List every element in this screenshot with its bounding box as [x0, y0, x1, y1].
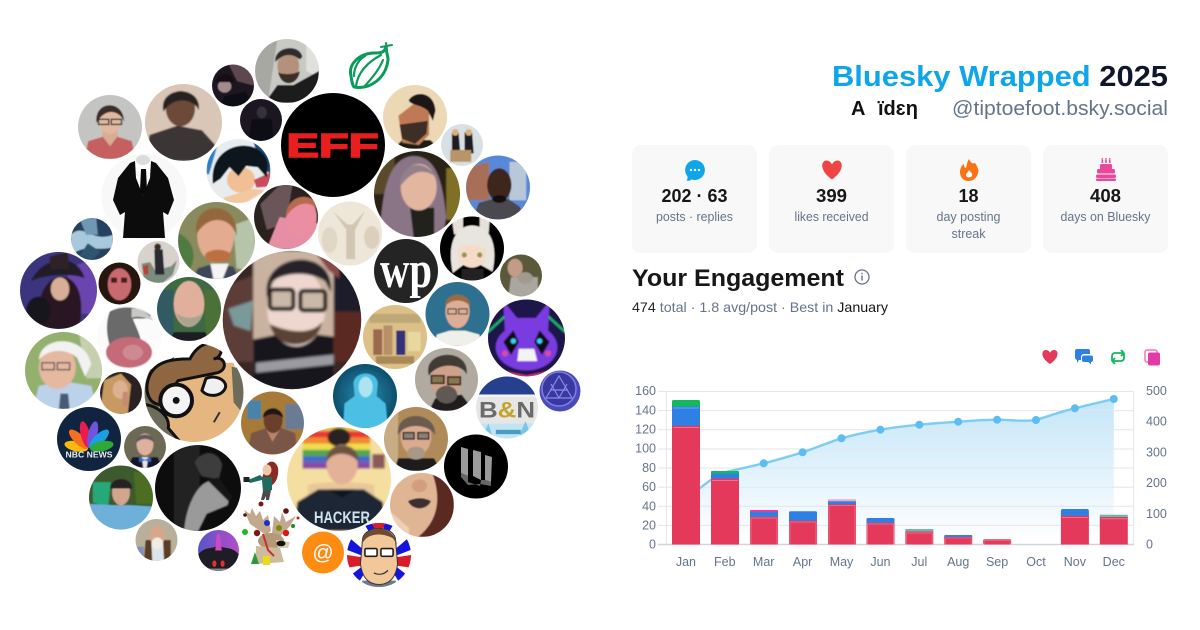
avatar: ginger man in suit: [178, 202, 255, 279]
icon: legend heart: [1042, 350, 1058, 364]
left axis labels: 120: [635, 422, 656, 436]
avatar: man profile on tan: [383, 85, 447, 149]
stat card: day posting streak: streak: [952, 227, 986, 241]
left axis labels: [635, 384, 656, 552]
stat card: day posting streak: day posting: [936, 210, 1001, 224]
avatar: man in bowtie: [124, 426, 166, 468]
left axis labels: 20: [642, 518, 656, 532]
avatar: bearded man on gray: [255, 39, 319, 103]
stat card: day posting streak: 18: [958, 186, 978, 206]
bar: Mar: [750, 510, 778, 545]
avatar: man in dark hoodie: [145, 84, 222, 161]
avatar: cartoon man with big glasses: [144, 344, 244, 442]
right axis labels: 100: [1146, 507, 1167, 521]
avatar: pencil sketch: [318, 202, 382, 266]
stat card: posts and replies: 202 · 63: [662, 186, 728, 206]
avatar: man on blue background: [419, 276, 496, 352]
right axis labels: 200: [1146, 476, 1167, 490]
icon: legend reposts: [1112, 350, 1124, 364]
right axis labels: 400: [1146, 414, 1167, 428]
avatar: anime boy with dark hair: [206, 139, 270, 203]
cumulative area: [686, 399, 1114, 544]
avatar: two women: [441, 124, 483, 166]
engagement summary: 474 total · 1.8 avg/post · Best in January: [632, 299, 888, 315]
avatar: woman with lilac hair: [374, 151, 460, 237]
avatar: smiling woman pink tint: [254, 185, 318, 249]
avatar: elderly man with glasses, white hair: [25, 332, 102, 409]
avatar: figure on dinosaur: [138, 241, 180, 283]
bar: Feb: [711, 471, 739, 544]
avatar: EFF logo: EFF: [286, 128, 378, 165]
stat card: day posting streak: [906, 145, 1031, 253]
left axis labels: 100: [635, 442, 656, 456]
handle: @tiptoefoot.bsky.social: [952, 98, 1168, 120]
avatar: central man with glasses: [222, 250, 362, 390]
stat card: likes received: likes received: [794, 210, 869, 224]
icon: legend replies: [1075, 349, 1093, 364]
legend: engagement types: [1042, 349, 1160, 366]
month labels: Jun: [870, 555, 891, 569]
left axis labels: 140: [635, 404, 656, 418]
month labels: May: [830, 555, 854, 569]
icon: legend quotes: [1145, 350, 1160, 366]
avatar: NBC News logo: NBC NEWS: [66, 450, 112, 460]
avatar: dark figure: [240, 99, 282, 141]
avatar: man in HACKER hoodie: [287, 427, 391, 531]
avatar: black and white figure: [155, 445, 241, 531]
month labels: Feb: [714, 555, 736, 569]
display name: A: [851, 98, 865, 120]
bar: Sep: [983, 539, 1011, 545]
month labels: Nov: [1064, 555, 1087, 569]
bar: Jun: [866, 518, 894, 545]
bar: Aug: [944, 535, 972, 545]
avatar: older man in blue shirt: [89, 466, 153, 530]
bar: Nov: [1061, 509, 1089, 544]
avatar: blonde woman praying hands: [100, 372, 142, 414]
right axis labels: 300: [1146, 446, 1167, 460]
left axis labels: 80: [642, 461, 656, 475]
chart: monthly engagement: [635, 384, 1167, 569]
stat card: posts and replies: [632, 145, 757, 253]
avatar: black man outdoors: [466, 156, 530, 220]
left axis labels: 60: [642, 480, 656, 494]
avatar: blue hooded figure: [333, 364, 397, 428]
icon: speech bubble: [685, 160, 705, 181]
heading: Your Engagement: Your Engagement: [632, 265, 844, 292]
icon: woman bitmoji: [244, 462, 278, 500]
avatar: man in HACKER hoodie: HACKER: [314, 509, 370, 527]
stacked bars: [672, 400, 1128, 545]
left axis labels: 160: [635, 384, 656, 398]
bar: Dec: [1100, 515, 1128, 544]
stat card: likes received: 399: [816, 186, 847, 206]
avatar: dark selfie with hat: [212, 64, 254, 106]
right axis labels: [1146, 384, 1167, 552]
stat card: likes received: [769, 145, 894, 253]
month labels: Dec: [1103, 555, 1125, 569]
stat card: days on Bluesky: days on Bluesky: [1060, 210, 1151, 224]
avatar: purple coin: [540, 370, 580, 412]
avatar: bald man with peacock feathers: [157, 277, 221, 341]
month labels: Oct: [1026, 555, 1046, 569]
avatar: woman's dark lips: [390, 473, 454, 537]
avatar: cartoon man on union flag: [347, 523, 411, 587]
avatar: B&N logo: [476, 376, 538, 438]
right axis labels: 500: [1146, 384, 1167, 398]
month labels: Mar: [753, 555, 774, 569]
left axis labels: 0: [649, 538, 656, 552]
month labels: Aug: [947, 555, 969, 569]
avatar: at-sign logo: @: [312, 542, 334, 564]
avatar: man in striped shirt: [241, 392, 304, 454]
right axis labels: 0: [1146, 538, 1153, 552]
avatar: skincare products flyer: [357, 299, 433, 375]
avatar: blue water scene: [71, 218, 113, 260]
avatar: white-haired anime girl: [440, 216, 504, 280]
avatar: black suit: [101, 154, 187, 239]
stat card: posts and replies: posts · replies: [656, 210, 733, 224]
avatar: at-sign logo: [302, 532, 344, 574]
month labels: Jul: [911, 555, 927, 569]
avatar: EFF logo: [281, 93, 385, 197]
bar: Jan: [672, 400, 700, 544]
line markers: [760, 395, 1118, 467]
avatar: B&N logo: B&N: [479, 398, 535, 422]
title: Bluesky Wrapped 2025: [832, 61, 1168, 93]
avatar: NBC News logo: [57, 407, 121, 471]
icon: birthday cake: [1096, 158, 1116, 181]
avatar: gray-haired man in glasses: [384, 407, 448, 471]
avatar: white bearded man: [136, 519, 178, 561]
grid lines: [658, 391, 1134, 545]
left axis labels: 40: [642, 500, 656, 514]
bar: May: [828, 499, 856, 545]
month labels: Jan: [676, 555, 696, 569]
bar: Jul: [905, 529, 933, 545]
icon: info: [855, 270, 869, 284]
avatar: black W logo: [444, 434, 508, 498]
icon: heart: [822, 160, 842, 180]
stat card: days on Bluesky: [1043, 145, 1168, 253]
avatar: curly-haired man with glasses: [415, 348, 478, 411]
icon: reindeer with ornaments: [242, 502, 300, 565]
avatar: man with glasses and plaid shirt: [78, 95, 142, 159]
avatar: Washington Post logo: wp: [380, 242, 432, 299]
icon: flame: [960, 159, 978, 181]
month labels: Sep: [986, 555, 1008, 569]
panel: avatar bubble cluster: [12, 33, 581, 593]
avatar: purple moth: [198, 530, 239, 571]
month labels: [676, 555, 1125, 569]
avatar: raven and rose drawing: [105, 306, 154, 369]
avatar: red skull face: [98, 262, 140, 304]
avatar: man with cat: [500, 254, 542, 296]
bar: Apr: [789, 511, 817, 545]
avatar: witch with black cat: [20, 252, 97, 329]
month labels: Apr: [793, 555, 812, 569]
icon: The Onion logo: [351, 43, 392, 87]
avatar: purple bunny mask: [488, 300, 565, 376]
cumulative line: [686, 399, 1114, 498]
display name: ïdɛη: [877, 98, 918, 120]
stat card: days on Bluesky: 408: [1090, 186, 1121, 206]
